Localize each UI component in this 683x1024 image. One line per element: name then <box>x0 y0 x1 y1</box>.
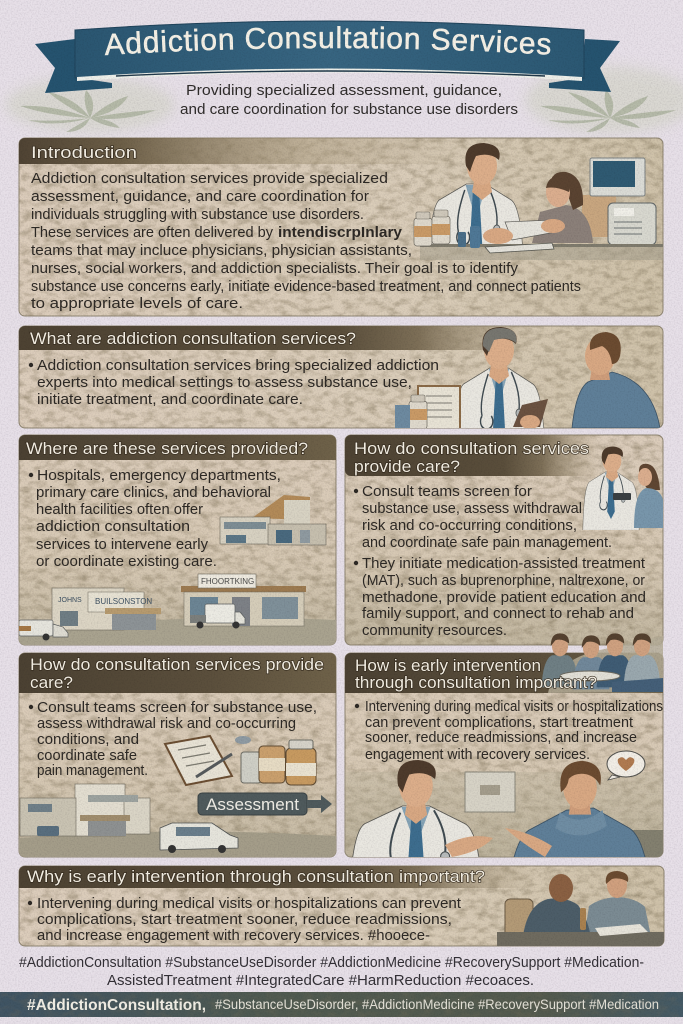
bullet text: can prevent complications, start treatment <box>365 714 634 731</box>
intro text: intendiscrpInlary <box>278 224 403 241</box>
arrow: assessment <box>198 793 332 815</box>
bullet text: coordinate safe <box>37 747 137 764</box>
arrow: assessment: Assessment <box>206 795 299 814</box>
heading: How do consultation services <box>354 439 589 458</box>
subtitle: Providing specialized assessment, guidance, <box>186 82 502 99</box>
medical machine <box>608 203 656 245</box>
bullet text: services to intervene early <box>36 536 208 553</box>
left clinic <box>52 588 161 630</box>
right clinic <box>181 574 306 626</box>
illustration: doctor and woman with tablet <box>583 446 663 530</box>
illustration: doctor with clipboard and patient <box>395 327 660 428</box>
illustration: group at table <box>542 633 663 693</box>
hashtags: AssistedTreatment #IntegratedCare #HarmReduction #ecoaces. <box>107 972 534 989</box>
bullet text: addiction consultation <box>36 518 190 535</box>
bullet text one: substance use, assess withdrawal <box>362 500 582 517</box>
illustration: hospital <box>220 495 326 545</box>
left clinic: JOHNS <box>58 597 82 604</box>
panel: where are these services provided <box>19 435 336 645</box>
heading <box>354 439 589 476</box>
intro text: assessment, guidance, and care coordination for <box>31 188 369 205</box>
bullet text two <box>354 555 646 639</box>
desk <box>420 244 663 247</box>
clipboard <box>485 243 554 253</box>
bullet text <box>355 698 663 763</box>
bullet text two: methadone, provide patient education and <box>362 589 646 606</box>
clipboard and bottles <box>418 386 460 430</box>
footer bar: #SubstanceUseDisorder, #AddictionMedicine #RecoverySupport #Medication <box>215 996 659 1012</box>
bullet text: and increase engagement with recovery services. #hooece- <box>37 927 430 944</box>
ambulance <box>19 620 68 640</box>
bullet text: conditions, and <box>37 731 139 748</box>
monitor <box>590 158 645 196</box>
icon: medicine bottles <box>241 740 316 785</box>
panel: how do consultation services provide care (left) <box>19 653 336 857</box>
icon: clipboard and pen <box>165 736 251 785</box>
heading <box>355 656 597 692</box>
bullet text <box>29 699 317 779</box>
van <box>190 604 245 628</box>
footer bar <box>0 992 683 1017</box>
bullet text <box>29 467 281 570</box>
bullet text: complications, start treatment sooner, reduce readmissions, <box>37 911 452 928</box>
bullet text: Hospitals, emergency departments, <box>37 467 281 484</box>
heading: through consultation important? <box>355 673 597 692</box>
intro text: individuals struggling with substance use disorders. <box>31 206 364 223</box>
subtitle <box>180 82 518 118</box>
heading: care? <box>30 673 73 692</box>
heading: How is early intervention <box>355 656 541 675</box>
illustration: two men at a table <box>497 871 664 946</box>
icon: speech bubble with heart <box>607 751 645 780</box>
bullet text: sooner, reduce readmissions, and increase <box>365 729 637 746</box>
illustration: doctor and patient at desk <box>414 143 663 260</box>
right clinic: FHOORTKING <box>201 577 254 586</box>
illustration: doctor and patient talking <box>345 760 663 857</box>
heading: introduction: Introduction <box>31 143 137 162</box>
heading: provide care? <box>354 457 460 476</box>
bullet text one: and coordinate safe pain management. <box>362 534 612 551</box>
bullet text <box>29 357 439 408</box>
heading: Where are these services provided? <box>26 439 308 458</box>
header foliage decoration <box>5 66 683 134</box>
panel: how is early intervention important <box>344 633 664 858</box>
bullet text <box>28 895 462 944</box>
footer bar: #AddictionConsultation, <box>27 997 206 1014</box>
panel: how do consultation services provide care (right) <box>345 435 663 645</box>
intro text: nurses, social workers, and addiction specialists. Their goal is to identify <box>31 260 519 277</box>
bullet text: initiate treatment, and coordinate care. <box>37 391 303 408</box>
bullet text two: (MAT), such as buprenorphine, naltrexone, or <box>362 572 645 589</box>
subtitle: and care coordination for substance use disorders <box>180 101 518 118</box>
heading <box>30 655 324 692</box>
bullet text: Consult teams screen for substance use, <box>37 699 317 716</box>
bullet text: Intervening during medical visits or hospitalizations can prevent <box>37 895 462 912</box>
bullet text: pain management. <box>37 762 148 779</box>
bottles <box>414 212 432 246</box>
patient <box>532 172 593 243</box>
banner tails <box>35 39 620 93</box>
illustration: clinic building and van <box>19 784 336 857</box>
banner body <box>75 21 584 78</box>
bullet text: Addiction consultation services bring specialized addiction <box>37 357 439 374</box>
intro text: to appropriate levels of care. <box>31 295 243 312</box>
bullet text: assess withdrawal risk and co-occurring <box>37 715 296 732</box>
heading: Why is early intervention through consultation important? <box>27 867 485 886</box>
bullet text: engagement with recovery services. <box>365 746 590 763</box>
hashtags: #AddictionConsultation #SubstanceUseDisorder #AddictionMedicine #RecoverySupport #Medication- <box>19 954 644 971</box>
banner title <box>105 48 556 55</box>
bullet text: experts into medical settings to assess substance use, <box>37 374 412 391</box>
intro text: substance use concerns early, initiate evidence-based treatment, and connect patients <box>31 278 581 295</box>
panel: what are addiction consultation services <box>18 326 664 428</box>
bullet text two: community resources. <box>362 622 507 639</box>
intro text: Addiction consultation services provide specialized <box>31 170 388 187</box>
bullet text: primary care clinics, and behavioral <box>36 484 271 501</box>
title banner: Addiction Consultation Services <box>104 26 550 56</box>
bullet text two: family support, and connect to rehab and <box>362 605 634 622</box>
hashtags <box>19 954 644 989</box>
bullet text one: risk and co-occurring conditions, <box>362 517 577 534</box>
illustration: clinics and vehicles <box>19 574 336 645</box>
heading: How do consultation services provide <box>30 655 324 674</box>
bullet text one: Consult teams screen for <box>362 483 532 500</box>
intro text <box>31 170 581 312</box>
doctor <box>432 143 523 244</box>
panel: introduction <box>19 138 663 316</box>
bullet text two: They initiate medication-assisted treatment <box>362 555 646 572</box>
title banner <box>35 20 620 93</box>
heading: What are addiction consultation services? <box>30 329 356 348</box>
panel: why is early intervention important <box>19 866 664 946</box>
intro text: These services are often delivered by <box>31 224 273 241</box>
left clinic: BUILSONSTON <box>95 597 152 606</box>
bullet text: health facilities often offer <box>36 501 203 518</box>
intro text: teams that may incluce physicians, physician assistants, <box>31 242 412 259</box>
bullet text: or coordinate existing care. <box>36 553 217 570</box>
bullet text one <box>354 483 612 551</box>
